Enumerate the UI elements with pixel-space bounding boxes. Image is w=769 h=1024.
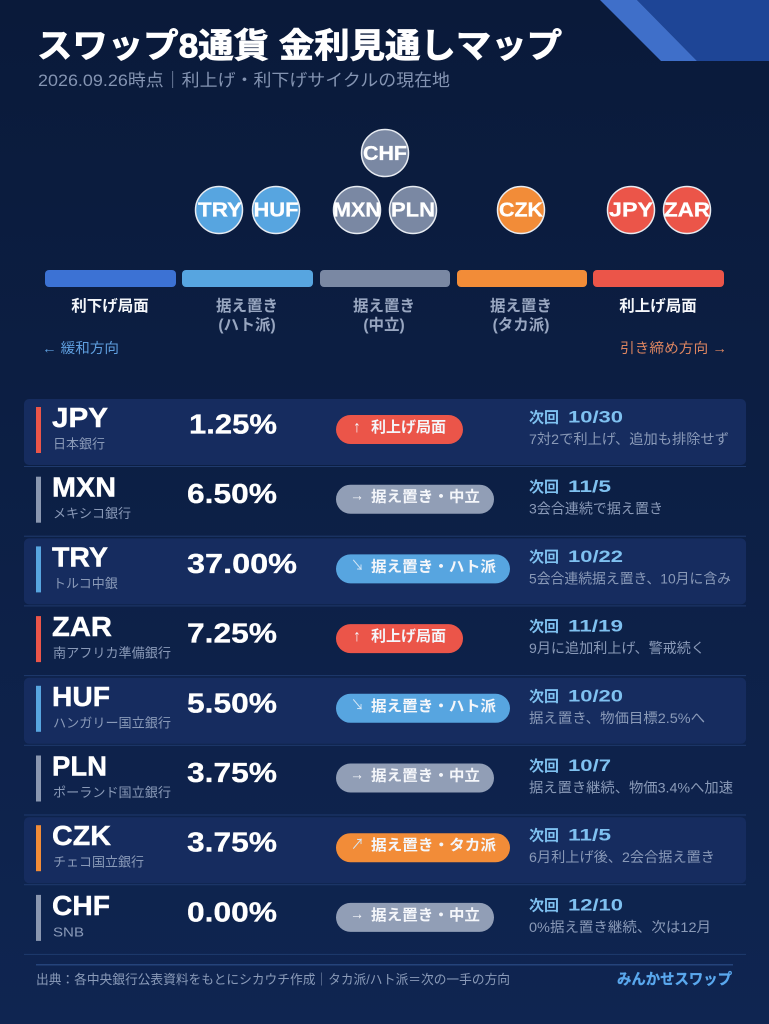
cycle map	[42, 130, 727, 356]
row: HUF: 据え置き・ハト派	[371, 697, 496, 715]
currency bubble: TRY: TRY	[198, 200, 243, 222]
row: PLN: PLN	[52, 750, 107, 782]
row: HUF: 据え置き、物価目標2.5%へ	[529, 710, 705, 726]
row: CHF: 次回	[529, 897, 559, 914]
rate table	[24, 399, 746, 955]
stage: hawkish hold	[457, 270, 587, 334]
brand: みんかせスワップ	[617, 971, 732, 988]
row: HUF: 5.50%	[187, 687, 277, 718]
row: TRY: 据え置き・ハト派	[371, 557, 496, 575]
row: TRY: 10/22	[568, 547, 623, 566]
row: CHF: →	[350, 906, 364, 923]
row: JPY	[24, 399, 746, 467]
row: PLN: →	[350, 766, 364, 784]
stage: tightening: 利上げ局面	[619, 297, 697, 315]
row: TRY: 次回	[529, 549, 559, 566]
stage: easing	[45, 270, 176, 315]
row: ZAR: ↑	[353, 628, 361, 645]
row: MXN: メキシコ銀行	[53, 506, 131, 521]
currency bubble: CZK: CZK	[499, 200, 544, 222]
stage: neutral hold	[320, 270, 450, 334]
row: PLN	[24, 750, 746, 816]
stage: easing: 利下げ局面	[71, 297, 149, 315]
title: スワップ8通貨 金利見通しマップ	[37, 28, 562, 66]
row: TRY: 5会合連続据え置き、10月に含み	[529, 570, 731, 586]
row: HUF: ハンガリー国立銀行	[53, 715, 171, 730]
currency bubble: JPY: JPY	[609, 200, 654, 222]
easing direction label: ← 緩和方向	[42, 340, 119, 356]
row: HUF: ↘	[351, 697, 364, 714]
row: JPY: ↑	[353, 419, 361, 436]
row: TRY	[24, 538, 746, 606]
row: CZK: CZK	[52, 820, 111, 851]
row: CZK: 3.75%	[187, 827, 277, 858]
row: CHF: 12/10	[568, 895, 623, 914]
row: PLN: 据え置き継続、物価3.4%へ加速	[529, 780, 733, 796]
row: HUF: 次回	[529, 688, 559, 705]
row: TRY: 37.00%	[187, 548, 297, 579]
row: MXN: →	[350, 488, 364, 505]
row: CZK: 6月利上げ後、2会合据え置き	[529, 849, 715, 865]
row: ZAR: 次回	[529, 619, 559, 636]
corner decoration	[600, 0, 769, 61]
currency bubble: CHF: CHF	[363, 143, 407, 165]
row: CHF: 据え置き・中立	[371, 906, 480, 924]
row: JPY: 日本銀行	[53, 436, 105, 452]
currency bubble: MXN: MXN	[333, 200, 381, 222]
row: JPY: 1.25%	[189, 408, 277, 440]
row: ZAR: 南アフリカ準備銀行	[53, 646, 171, 661]
currency bubble: PLN: PLN	[391, 200, 435, 222]
row: CZK: 11/5	[568, 826, 611, 845]
row: TRY: TRY	[52, 541, 108, 572]
row: JPY: JPY	[52, 402, 108, 433]
source note: 出典：各中央銀行公表資料をもとにシカウチ作成｜タカ派/ハト派＝次の一手の方向	[36, 972, 510, 987]
currency bubble: HUF	[252, 186, 300, 234]
row: PLN: 次回	[529, 758, 559, 775]
row: JPY: 10/30	[568, 408, 623, 426]
row: ZAR: 利上げ局面	[371, 628, 446, 645]
row: PLN: 3.75%	[187, 757, 277, 788]
currency bubble: CHF	[362, 130, 408, 176]
currency bubble: PLN	[390, 186, 436, 234]
currency bubble: ZAR: ZAR	[664, 200, 711, 222]
row: PLN: 据え置き・中立	[371, 766, 480, 784]
stage: neutral hold: 据え置き	[353, 297, 415, 315]
row: CHF: CHF	[52, 890, 110, 921]
row: JPY: 7対2で利上げ、追加も排除せず	[529, 431, 729, 447]
currency bubble: ZAR	[664, 186, 711, 234]
currency bubble: MXN	[333, 186, 381, 234]
stage: neutral hold: (中立)	[363, 316, 405, 334]
row: MXN	[24, 472, 746, 537]
row: TRY: トルコ中銀	[53, 576, 118, 591]
row: MXN: MXN	[52, 472, 116, 503]
row: ZAR: 9月に追加利上げ、警戒続く	[529, 640, 705, 656]
row: CZK	[24, 817, 746, 885]
row: ZAR: 7.25%	[187, 618, 277, 649]
row: ZAR: ZAR	[52, 611, 112, 642]
row: MXN: 次回	[529, 479, 559, 496]
row: ZAR	[24, 611, 746, 676]
stage: tightening	[593, 270, 724, 315]
row: MXN: 据え置き・中立	[371, 488, 480, 506]
currency bubble: HUF: HUF	[254, 200, 298, 222]
stage: dovish hold	[182, 270, 313, 334]
row: HUF: HUF	[52, 681, 110, 712]
row: MXN: 6.50%	[187, 478, 277, 509]
row: CHF	[24, 890, 746, 955]
row: CHF: 0.00%	[187, 896, 277, 927]
row: MXN: 11/5	[568, 477, 611, 496]
row: CZK: 据え置き・タカ派	[371, 836, 496, 854]
row: HUF: 10/20	[568, 686, 623, 705]
row: TRY: ↘	[351, 557, 364, 574]
row: HUF	[24, 678, 746, 746]
row: CZK: 次回	[529, 828, 559, 845]
row: ZAR: 11/19	[568, 617, 623, 636]
row: PLN: 10/7	[568, 756, 611, 775]
row: JPY: 次回	[529, 410, 559, 426]
row: CHF: SNB	[53, 924, 84, 939]
row: CZK: チェコ国立銀行	[53, 855, 144, 870]
row: MXN: 3会合連続で据え置き	[529, 501, 663, 517]
currency bubble: JPY	[608, 186, 654, 234]
currency bubble: TRY	[196, 186, 243, 234]
tightening direction label: 引き締め方向 →	[620, 340, 727, 356]
stage: dovish hold: (ハト派)	[218, 317, 276, 334]
row: JPY: 利上げ局面	[371, 419, 446, 436]
subtitle: 2026.09.26時点｜利上げ・利下げサイクルの現在地	[38, 71, 450, 90]
row: PLN: ポーランド国立銀行	[53, 785, 171, 800]
stage: hawkish hold: (タカ派)	[493, 316, 549, 334]
currency bubble: CZK	[498, 186, 544, 234]
row: CZK: ↗	[351, 836, 364, 853]
stage: hawkish hold: 据え置き	[490, 297, 552, 315]
stage: dovish hold: 据え置き	[216, 297, 278, 315]
row: CHF: 0%据え置き継続、次は12月	[529, 919, 711, 935]
